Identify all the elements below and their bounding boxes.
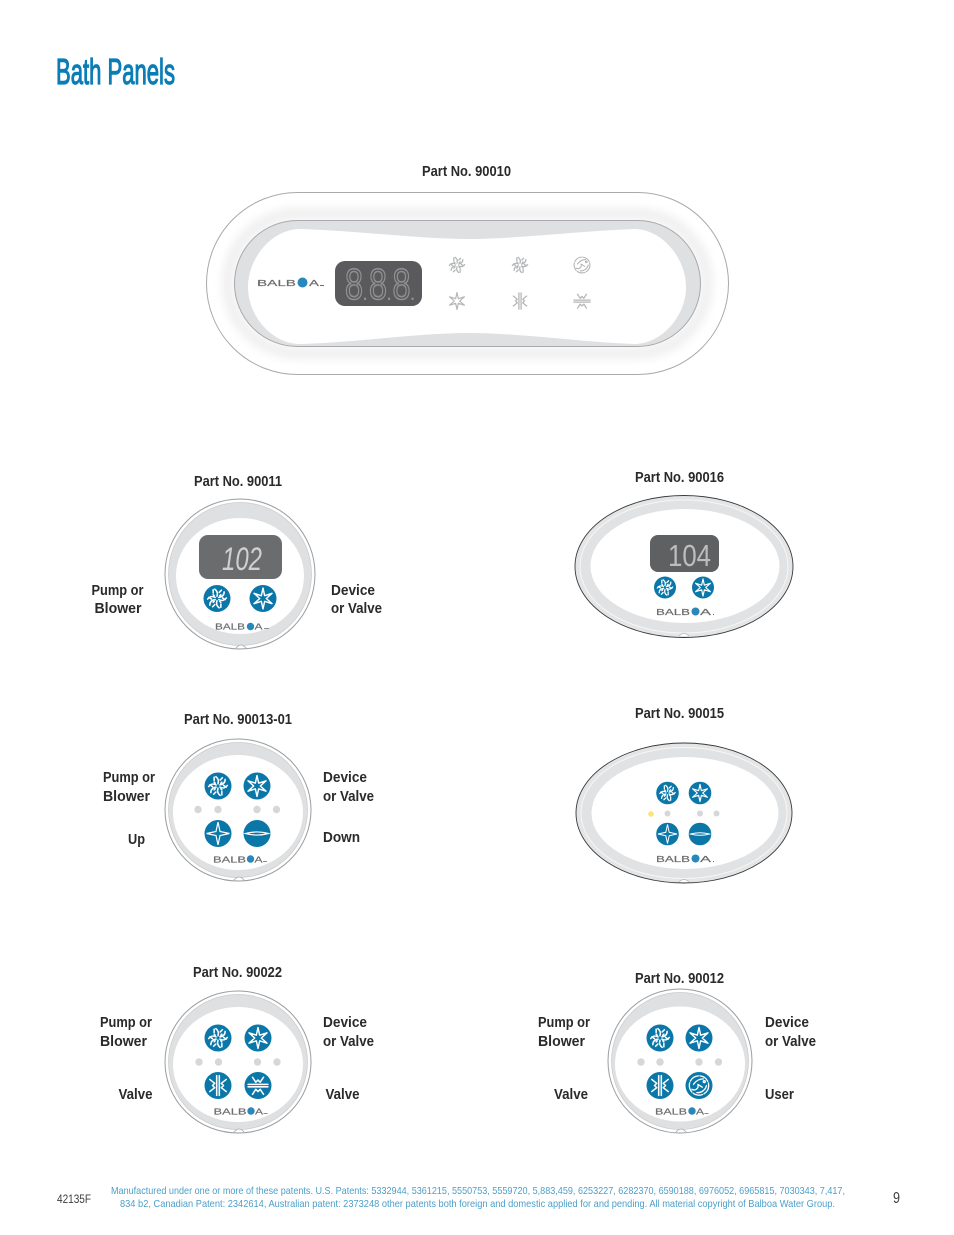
logo: [655, 1106, 708, 1116]
button: valve: [204, 1072, 232, 1099]
heading: part no. 90010: Part No. 90010: [422, 163, 511, 180]
heading: Part No. 90013-01: [184, 711, 292, 728]
bezel shading: [228, 214, 707, 353]
label pump: Pump or: [103, 769, 155, 786]
label valve left: Valve: [118, 1086, 152, 1103]
button: device: [250, 585, 276, 612]
icon: valve horizontal: [574, 294, 590, 308]
logo: BALB: [656, 607, 690, 617]
document code: 42135F: [57, 1192, 91, 1206]
button: device: [689, 782, 711, 804]
button: up: [204, 820, 232, 847]
icon: device: [450, 292, 464, 310]
label pump: Blower: [100, 1033, 147, 1050]
logo: [257, 278, 324, 288]
logo: A: [700, 854, 712, 864]
LED display: .: [386, 280, 392, 305]
label valve: Valve: [554, 1086, 588, 1103]
label pump: Blower: [103, 788, 150, 805]
LED display: 8: [345, 260, 363, 309]
label device: or Valve: [323, 788, 374, 805]
bezel: [165, 499, 315, 649]
logo: [214, 1106, 268, 1116]
button: up: [656, 823, 679, 845]
logo: A: [254, 622, 263, 632]
label left: Blower: [94, 600, 142, 617]
title: Bath Panels: [56, 51, 175, 92]
icon: pump 2: [512, 257, 528, 273]
logo: A: [255, 1106, 263, 1116]
logo: A: [309, 278, 320, 288]
button: pump: [204, 585, 230, 612]
button: pump: [646, 1024, 674, 1052]
label right: Device: [331, 582, 375, 599]
LED display: 8: [369, 260, 387, 309]
gray recessed band: [234, 220, 700, 346]
logo: A: [254, 854, 263, 864]
logo: [213, 854, 267, 864]
heading: Part No. 90022: [193, 964, 282, 981]
logo: BALB: [257, 278, 297, 288]
label left: Pump or: [92, 582, 144, 599]
bezel: [575, 496, 793, 638]
logo: BALB: [215, 622, 245, 632]
indicator dots: [194, 806, 280, 813]
bezel: [165, 991, 311, 1133]
button: valve horizontal: [244, 1072, 272, 1099]
heading: Part No. 90016: [635, 469, 724, 486]
panel: part no. 90010: [206, 163, 728, 374]
LED display: 8: [392, 260, 410, 309]
panel: part no. 90016: [575, 469, 793, 638]
logo: BALB: [213, 854, 246, 864]
display: [199, 535, 282, 579]
LED display: .: [410, 280, 416, 305]
label pump: Pump or: [538, 1014, 590, 1031]
LED display: [335, 260, 422, 309]
label device: or Valve: [765, 1033, 816, 1050]
button: valve: [646, 1072, 674, 1099]
logo: BALB: [656, 854, 690, 864]
logo: A: [696, 1106, 704, 1116]
logo: BALB: [214, 1106, 247, 1116]
label down: Down: [323, 829, 360, 846]
button: device: [686, 1024, 712, 1052]
panel: part no. 90015: [576, 705, 792, 883]
logo: [656, 854, 714, 864]
label device: or Valve: [323, 1033, 374, 1050]
button: device: [244, 772, 270, 800]
panel: part no. 90022: [100, 964, 374, 1133]
icon: user: [574, 257, 590, 273]
display: [650, 535, 719, 573]
heading: Part No. 90011: [194, 473, 282, 490]
bezel: [576, 743, 792, 883]
label device: Device: [765, 1014, 809, 1031]
icon: valve: [513, 293, 527, 309]
label valve right: Valve: [326, 1086, 360, 1103]
logo: BALB: [655, 1106, 687, 1116]
button: pump: [204, 1024, 232, 1052]
logo: [656, 607, 714, 617]
display: 102: [222, 541, 262, 577]
indicator dots: [637, 1058, 722, 1066]
page number: 9: [893, 1190, 900, 1207]
label right: or Valve: [331, 600, 382, 617]
indicator dots: [648, 810, 720, 817]
patent notice: Manufactured under one or more of these patents. U.S. Patents: 5332944, 5361215, 5550753, 5559720, 5,883,459, 6253227, 6282370, 6590188, 6976052, 6965815, 7030343, 7,417,: [111, 1185, 845, 1197]
button: pump: [204, 772, 232, 800]
bezel: [165, 739, 311, 881]
button: pump: [656, 782, 679, 804]
label up: Up: [128, 831, 145, 848]
panel: part no. 90011: [92, 473, 382, 649]
button: down: [244, 820, 270, 847]
patent notice: 834 b2, Canadian Patent: 2342614, Australian patent: 2373248 other patents both foreign and domestic applied for and pending. All material copyright of Balboa Water Group.: [120, 1198, 835, 1210]
heading: Part No. 90012: [635, 970, 724, 987]
logo: A: [700, 607, 712, 617]
heading: Part No. 90015: [635, 705, 724, 722]
panel: part no. 90012: [538, 970, 816, 1133]
label pump: Blower: [538, 1033, 585, 1050]
label device: Device: [323, 769, 367, 786]
indicator dots: [195, 1058, 281, 1066]
button: user: [686, 1072, 712, 1099]
button: device: [692, 576, 714, 598]
LED display: .: [362, 280, 368, 305]
white face: [248, 229, 686, 344]
button: device: [244, 1024, 272, 1052]
label device: Device: [323, 1014, 367, 1031]
bezel: stadium outline: [206, 192, 728, 374]
button: down: [689, 823, 711, 845]
label pump: Pump or: [100, 1014, 152, 1031]
display: 104: [668, 538, 711, 573]
panel: part no. 90013-01: [103, 711, 374, 881]
logo: [215, 622, 269, 632]
button: pump: [654, 576, 676, 598]
bezel: [608, 989, 752, 1133]
icon: pump 1: [449, 257, 465, 273]
label user: User: [765, 1086, 794, 1103]
